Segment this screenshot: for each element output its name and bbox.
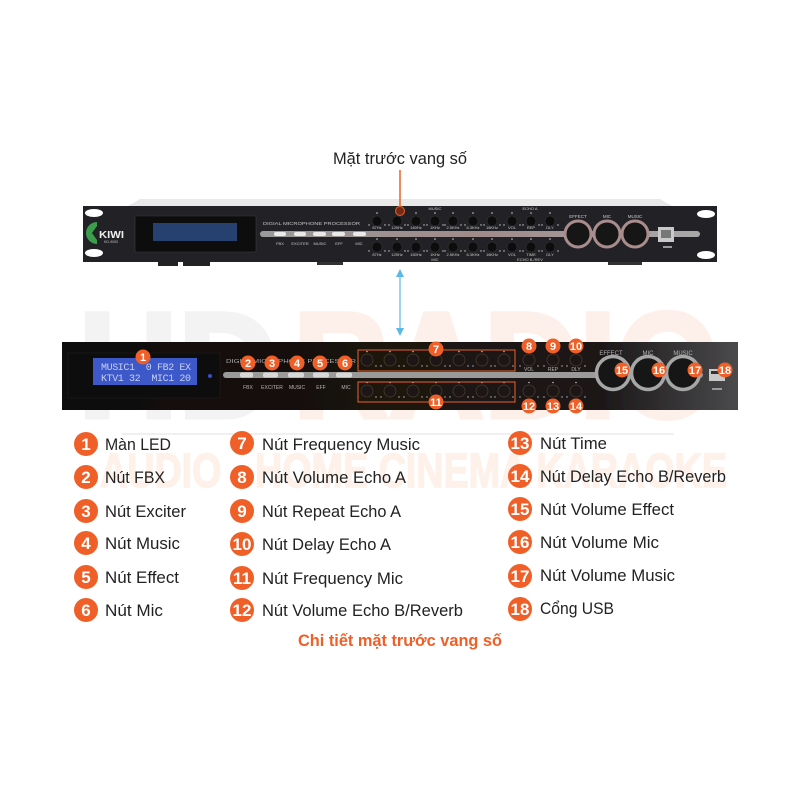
- legend column 1: 5: [81, 568, 91, 587]
- detail usb: [709, 369, 725, 390]
- legend column 1: 3: [81, 502, 91, 521]
- badges on detail photo: 6: [342, 358, 348, 370]
- legend column 2: Nút Frequency Mic: [262, 569, 403, 588]
- legend column 3: Nút Volume Music: [540, 566, 675, 585]
- device: detail photo: MUSIC: [289, 385, 305, 391]
- device: top photo: DLY: [546, 225, 554, 230]
- lcd: [93, 358, 197, 385]
- badges on detail photo: 8: [526, 341, 532, 353]
- big knobs: EFFECT: [569, 214, 587, 219]
- logo: [86, 222, 124, 244]
- legend column 3: 13: [511, 434, 529, 453]
- detail big knobs: [596, 351, 700, 390]
- badges on detail photo: 14: [570, 401, 583, 413]
- caption: Chi tiết mặt trước vang số: [298, 632, 502, 650]
- legend column 2: Nút Delay Echo A: [262, 535, 392, 554]
- legend column 2: Nút Volume Echo A: [262, 468, 407, 487]
- heading: front panel: Mặt trước vang số: [333, 149, 468, 168]
- device: detail photo: EXCITER: [261, 385, 283, 391]
- legend column 3: 16: [511, 533, 529, 552]
- legend column 1: Nút FBX: [105, 468, 165, 487]
- device: top photo: 6.3KHz: [466, 252, 480, 257]
- device: detail photo: MIC: [341, 385, 351, 391]
- legend column 1: Nút Exciter: [105, 502, 186, 521]
- device: top photo: 1KHz: [430, 252, 440, 257]
- legend column 3: Nút Volume Effect: [540, 500, 674, 519]
- device: top photo: DLY: [546, 252, 554, 257]
- device: top photo: VOL: [508, 252, 517, 257]
- legend column 1: Nút Effect: [105, 568, 179, 587]
- badges on detail photo: 1: [140, 352, 146, 364]
- badges on detail photo: 11: [430, 397, 442, 409]
- badges on detail photo: 2: [245, 358, 251, 370]
- legend column 1: 6: [81, 601, 91, 620]
- watermark: HDRADIO: RADIO: [293, 281, 719, 449]
- legend column 2: 8: [237, 468, 247, 487]
- legend column 3: 17: [511, 567, 529, 586]
- device: top photo: EXCITER: [291, 241, 309, 246]
- legend column 2: Nút Frequency Music: [262, 435, 420, 454]
- highlight boxes: [358, 350, 515, 402]
- device: top photo: MUSIC: [314, 241, 327, 246]
- device: detail photo: FBX: [243, 385, 254, 391]
- legend column 3: 14: [511, 467, 530, 486]
- device: top photo: 16KHz: [486, 252, 498, 257]
- device: detail photo: EFF: [316, 385, 326, 391]
- device: top photo: FBX: [276, 241, 284, 246]
- logo: KIWI: [99, 230, 124, 241]
- legend column 2: 9: [237, 502, 247, 521]
- device: top photo: MIC: [355, 241, 363, 246]
- device: detail photo: REP: [548, 367, 559, 373]
- badges on detail photo: 18: [719, 365, 731, 377]
- badges on detail photo: 7: [433, 344, 439, 356]
- legend column 3: Nút Volume Mic: [540, 533, 659, 552]
- badges on detail photo: 9: [550, 341, 556, 353]
- watermark: HDRADIO: HD: [78, 281, 278, 449]
- big knobs: [565, 214, 648, 247]
- lcd: MUSIC1 0 FB2 EX: [101, 363, 191, 374]
- badges on detail photo: 12: [523, 401, 535, 413]
- device: top photo: 87Hz: [372, 225, 382, 230]
- display: [135, 216, 256, 252]
- legend column 1: 4: [81, 534, 91, 553]
- big knobs: MIC: [603, 214, 612, 219]
- device: top photo: 125Hz: [391, 252, 403, 257]
- device: detail photo: VOL: [524, 367, 534, 373]
- watermark: HDRADIO: [78, 281, 719, 449]
- lcd: KTV1 32 MIC1 20: [101, 374, 191, 385]
- device: top photo: [83, 199, 717, 266]
- device: top photo: 6.3KHz: [466, 225, 480, 230]
- legend column 1: 2: [81, 468, 91, 487]
- device: top photo: ECHO A: [522, 206, 538, 211]
- badges on detail photo: 4: [294, 358, 301, 370]
- arrow: blue double: [396, 269, 404, 336]
- device: detail photo: [62, 342, 738, 410]
- pointer: orange line: [396, 170, 404, 216]
- device: top photo: MUSIC: [429, 206, 442, 211]
- device: top photo: 1KHz: [430, 225, 440, 230]
- legend column 1: Nút Music: [105, 534, 180, 553]
- badges on detail photo: 17: [689, 365, 701, 377]
- logo: KD-9000: [104, 240, 118, 244]
- badges on detail photo: 5: [317, 358, 323, 370]
- legend column 3: Nút Delay Echo B/Reverb: [540, 467, 726, 486]
- detail knobs: [357, 351, 586, 398]
- device: top photo: 87Hz: [372, 252, 382, 257]
- legend column 2: 7: [237, 434, 247, 453]
- device: top photo: ECHO B./REV: [517, 257, 543, 262]
- device: top photo: 160Hz: [410, 225, 422, 230]
- device: top photo: DIGIAL MICROPHONE PROCESSOR: [263, 221, 361, 226]
- legend column 2: 11: [233, 569, 251, 588]
- legend column 1: [74, 432, 186, 622]
- legend column 1: Màn LED: [105, 435, 171, 454]
- device: top photo: 160Hz: [410, 252, 422, 257]
- device: top photo: 2.5KHz: [446, 225, 460, 230]
- legend column 2: 12: [233, 601, 251, 620]
- top knobs: [368, 212, 559, 252]
- legend column 3: Nút Time: [540, 434, 607, 453]
- legend column 3: 18: [511, 600, 529, 619]
- badges on detail photo: [136, 338, 732, 414]
- detail big knobs: MUSIC: [673, 351, 693, 357]
- legend column 3: 15: [511, 500, 529, 519]
- device: top photo: VOL: [508, 225, 517, 230]
- legend column 3: [508, 431, 726, 621]
- device: detail photo: DIGIAL MICROPHONE PROCESSOR: [226, 359, 356, 365]
- device: top photo: EFF: [335, 241, 343, 246]
- legend column 3: Cổng USB: [540, 599, 614, 618]
- legend column 2: 10: [233, 535, 251, 554]
- badges on detail photo: 13: [547, 401, 559, 413]
- device: top photo: 16KHz: [486, 225, 498, 230]
- badges on detail photo: 16: [653, 365, 665, 377]
- device: top photo: 125Hz: [391, 225, 403, 230]
- legend column 2: Nút Volume Echo B/Reverb: [262, 601, 463, 620]
- legend column 2: Nút Repeat Echo A: [262, 502, 402, 521]
- device: top photo: REP: [527, 225, 535, 230]
- detail big knobs: EFFECT: [599, 351, 623, 357]
- device: top photo: MIC: [431, 257, 439, 262]
- badges on detail photo: 15: [616, 365, 628, 377]
- big knobs: MUSIC: [628, 214, 643, 219]
- legend column 1: Nút Mic: [105, 601, 163, 620]
- usb port: [658, 227, 674, 248]
- legend column 1: 1: [81, 435, 91, 454]
- device: detail photo: DLY: [571, 367, 581, 373]
- device: top photo: TIME: [526, 252, 536, 257]
- badges on detail photo: 10: [570, 341, 582, 353]
- legend column 2: [230, 431, 463, 622]
- badges on detail photo: 3: [269, 358, 275, 370]
- device: top photo: 2.5KHz: [446, 252, 460, 257]
- detail big knobs: MIC: [642, 351, 654, 357]
